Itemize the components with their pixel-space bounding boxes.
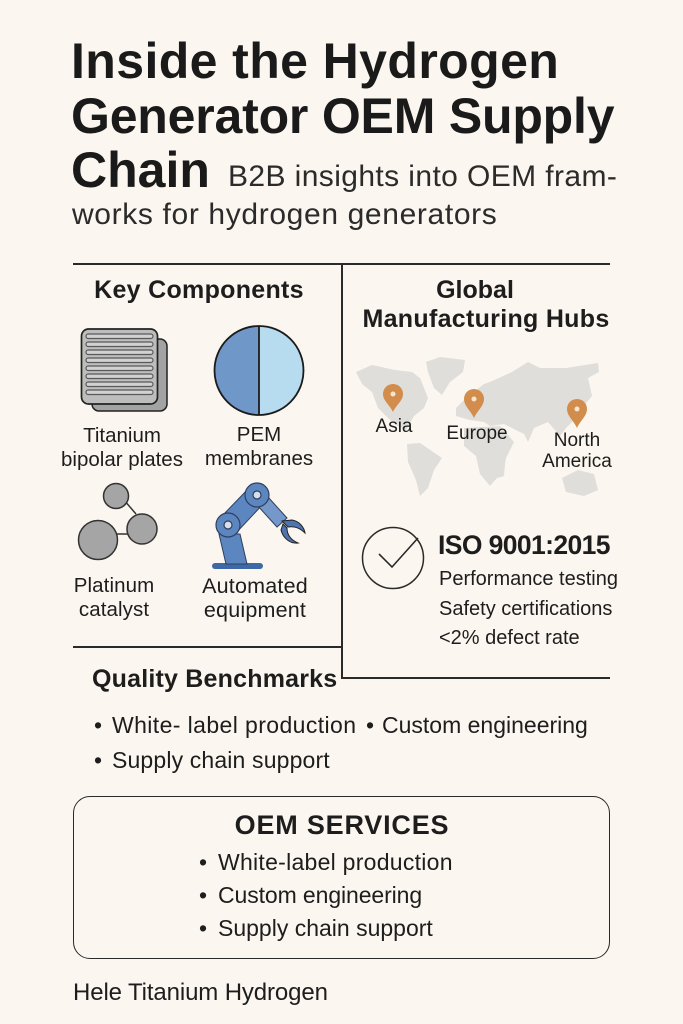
label: PEM membranes: PEM — [237, 423, 281, 446]
title: Inside the Hydrogen — [71, 33, 559, 89]
quality benchmarks list: • — [366, 712, 374, 738]
heading: ISO 9001:2015: ISO 9001:2015 — [438, 530, 610, 560]
label: platinum catalyst: catalyst — [79, 598, 149, 621]
OEM services list: Custom engineering — [218, 882, 422, 908]
subtitle — [72, 160, 617, 230]
label: Asia: Asia — [376, 416, 412, 437]
quality benchmarks list: Custom engineering — [382, 712, 588, 738]
OEM services list: • — [199, 849, 207, 875]
panel: global manufacturing hubs — [356, 276, 618, 649]
heading: OEM services: OEM SERVICES — [235, 810, 449, 840]
quality benchmarks list: White- label production — [112, 712, 356, 738]
OEM services list: White-label production — [218, 849, 453, 875]
heading: quality benchmarks: Quality Benchmarks — [92, 665, 337, 693]
label: platinum catalyst: Platinum — [74, 574, 154, 597]
panel: key components — [61, 276, 313, 622]
label: titanium bipolar plates: Titanium — [83, 424, 161, 447]
quality benchmarks list: • — [94, 712, 102, 738]
pin: North America — [567, 399, 587, 428]
pin: Asia — [383, 384, 403, 412]
label: North America: North — [554, 430, 600, 451]
quality benchmarks list — [94, 712, 588, 773]
heading: manufacturing hubs: Manufacturing Hubs — [362, 305, 610, 333]
icon: certification check — [362, 526, 424, 590]
world map — [356, 357, 599, 496]
OEM services list — [199, 849, 453, 941]
heading: key components: Key Components — [94, 276, 304, 304]
label: titanium bipolar plates — [61, 424, 183, 471]
label: platinum catalyst — [74, 574, 154, 621]
icon: PEM membranes — [214, 325, 304, 416]
label: Europe: Europe — [446, 423, 508, 444]
title: Generator OEM Supply — [71, 88, 614, 144]
certification list: <2% defect rate — [439, 627, 580, 649]
panel: OEM services — [73, 796, 610, 959]
label: automated equipment: Automated — [202, 574, 308, 598]
icon: titanium bipolar plates — [80, 328, 168, 412]
label: North America: America — [542, 451, 612, 472]
icon: platinum catalyst — [78, 482, 158, 560]
certification list — [439, 568, 618, 649]
label: automated equipment — [202, 574, 308, 622]
label: PEM membranes — [205, 423, 313, 470]
label: titanium bipolar plates: bipolar plates — [61, 448, 183, 471]
pin: Europe — [464, 389, 484, 418]
heading: global: Global — [436, 276, 514, 304]
title — [71, 33, 614, 198]
title: Chain — [71, 142, 210, 198]
certification list: Safety certifications — [439, 598, 612, 620]
label: automated equipment: equipment — [204, 598, 306, 622]
OEM services list: Supply chain support — [218, 915, 433, 941]
footer brand: Hele Titanium Hydrogen — [73, 979, 328, 1006]
quality benchmarks list: • — [94, 747, 102, 773]
subtitle: works for hydrogen generators — [72, 198, 497, 230]
certification list: Performance testing — [439, 568, 618, 590]
icon: automated equipment robot arm — [212, 482, 306, 569]
quality benchmarks list: Supply chain support — [112, 747, 330, 773]
label: North America — [542, 430, 612, 472]
subtitle: B2B insights into OEM fram- — [228, 160, 617, 192]
OEM services list: • — [199, 915, 207, 941]
OEM services list: • — [199, 882, 207, 908]
label: PEM membranes: membranes — [205, 447, 313, 470]
